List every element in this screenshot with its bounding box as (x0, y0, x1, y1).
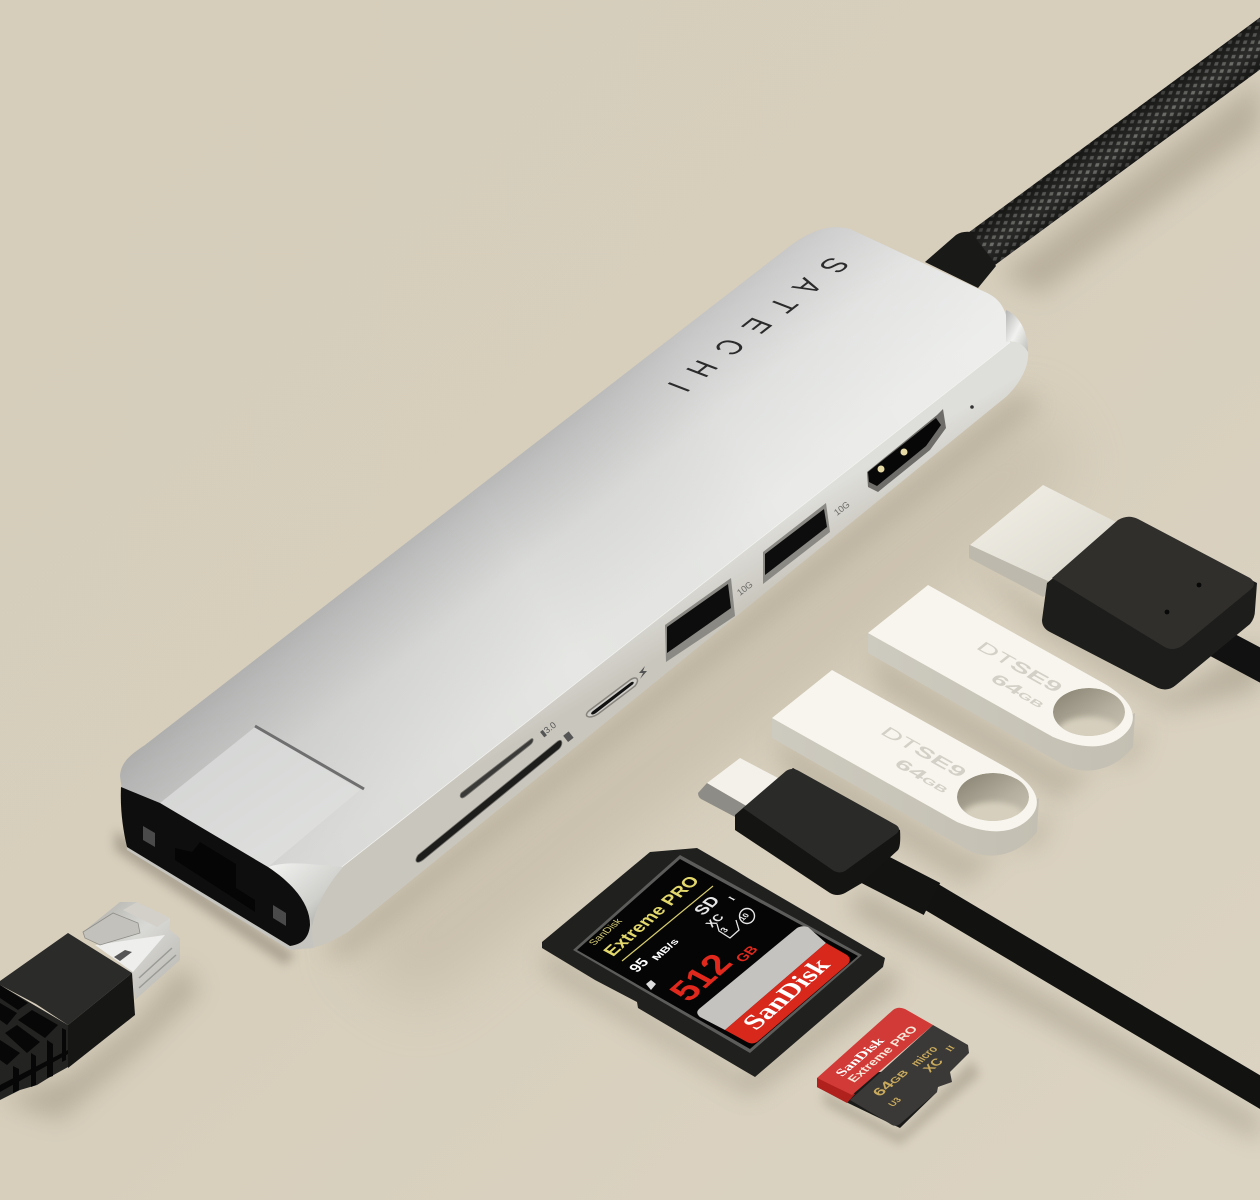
ethernet RJ45 plug (0, 902, 180, 1100)
capacity 512: 512 (660, 948, 741, 1007)
U3 mark: U3 (886, 1096, 904, 1108)
braided cable (925, 16, 1260, 288)
left chamfer highlight (268, 863, 343, 926)
SD icon (563, 731, 574, 742)
long cable (930, 896, 1260, 1101)
boot rib slots (0, 985, 68, 1093)
microSD card (817, 1008, 969, 1128)
USB-C plug and cable (698, 758, 1260, 1101)
drive label: DTSE9 (972, 639, 1067, 696)
hub body (120, 227, 1028, 950)
microSD label: ▮3.0 (538, 720, 558, 739)
SD card (542, 848, 885, 1077)
RJ45 port plate (160, 727, 360, 867)
HDMI pins (878, 448, 908, 472)
red area (817, 1008, 933, 1095)
plug top face (743, 769, 899, 872)
drive side (772, 718, 1039, 856)
metal tip side (969, 540, 1060, 597)
HDMI cable stub (1200, 633, 1260, 681)
drive top (868, 585, 1133, 746)
boot silhouette (0, 985, 68, 1100)
drive top (772, 670, 1037, 831)
end lip (121, 795, 348, 950)
metal tip (707, 758, 778, 808)
yellow rule (622, 886, 713, 961)
SanDisk text: SanDisk (831, 1035, 888, 1078)
label border (573, 855, 862, 1053)
plug body (735, 768, 900, 895)
key ring hole (957, 773, 1029, 821)
U3 badge (717, 920, 739, 938)
front side face (312, 342, 1028, 947)
speed unit: MB/s (650, 937, 683, 962)
power bolt icon (639, 666, 647, 679)
SD logo: SD (690, 893, 724, 918)
UHS II mark: II (943, 1043, 958, 1053)
XC logo: XC (919, 1055, 947, 1074)
lock icon (646, 980, 656, 990)
cable strain relief (858, 861, 932, 899)
capacity GB: GB (732, 943, 761, 964)
UHS I mark: I (726, 895, 738, 902)
black label (577, 859, 858, 1049)
ethernet socket (175, 842, 255, 912)
class 10 badge: 10 (737, 911, 752, 922)
class 10 badge (737, 908, 754, 924)
microSD slot (460, 739, 533, 798)
USB flash drive upper (868, 585, 1135, 771)
Extreme PRO text: Extreme PRO (844, 1024, 921, 1084)
black area (850, 1025, 969, 1126)
metal tip side (698, 783, 750, 818)
capacity label: 64 GB (890, 757, 954, 796)
grey writing strip (697, 926, 826, 1030)
SD slot (416, 740, 562, 862)
card edge (817, 1070, 937, 1128)
drive label: DTSE9 (876, 724, 971, 781)
boot side face (68, 973, 135, 1068)
capacity label: 64 GB (986, 672, 1050, 711)
brand wordmark: SATECHI (646, 253, 857, 405)
HDMI plug (969, 485, 1260, 689)
plate slot line (255, 726, 364, 789)
USB flash drive lower (772, 670, 1039, 856)
black end face (121, 787, 310, 946)
vent holes (1165, 583, 1201, 614)
XC logo: XC (702, 912, 727, 929)
USB-A port left (665, 578, 735, 662)
label 10G right: 10G (832, 499, 852, 518)
clear plug (83, 902, 180, 1000)
SanDisk band text: SanDisk (736, 954, 837, 1034)
metal tip top (970, 485, 1116, 582)
boot top face (0, 933, 132, 1025)
indicator window right (273, 905, 286, 926)
speed value: 95 (626, 956, 653, 975)
cable collar (925, 232, 996, 288)
red lower edge (817, 1078, 855, 1103)
card shell (542, 848, 885, 1077)
status LED (970, 405, 974, 409)
drive side (868, 633, 1135, 771)
64GB text: 64GB (868, 1067, 912, 1098)
microSD logo: micro (907, 1044, 941, 1068)
USB-C port (586, 678, 637, 717)
key ring hole (1053, 688, 1125, 736)
plug top face (1052, 517, 1254, 649)
top face (120, 227, 1010, 868)
label 10G left: 10G (735, 579, 755, 598)
indicator window left (143, 826, 155, 847)
right chamfer highlight (1006, 310, 1028, 352)
red SanDisk band (725, 943, 850, 1044)
HDMI port (867, 409, 946, 492)
SanDisk small: SanDisk (587, 917, 625, 947)
U3 badge: 3 (718, 926, 731, 934)
plug body (1042, 517, 1257, 689)
Extreme PRO: Extreme PRO (599, 873, 704, 959)
USB-A port right (763, 503, 830, 584)
